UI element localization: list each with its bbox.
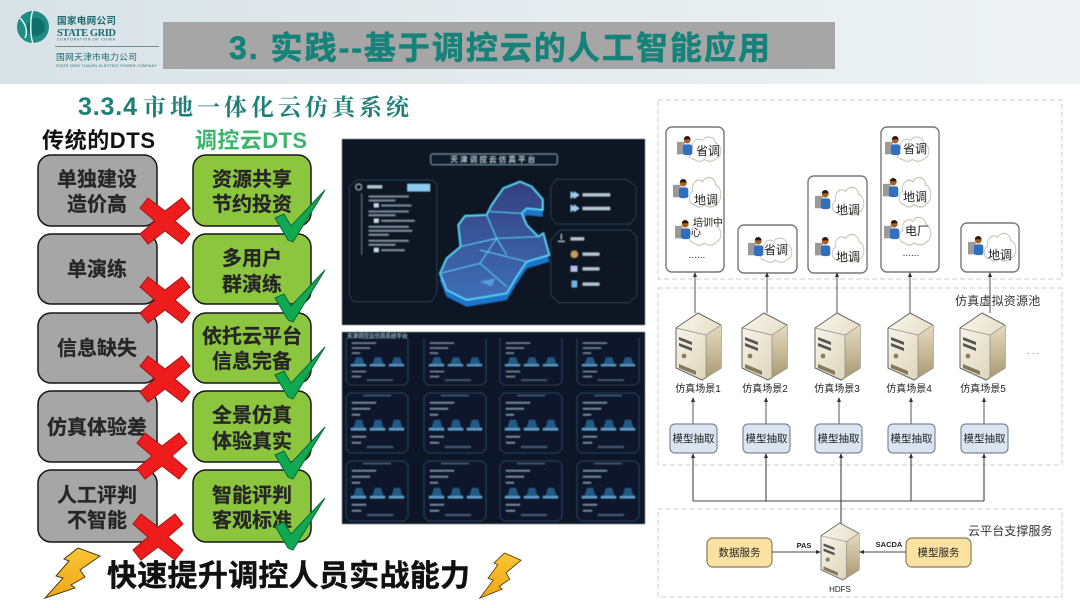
icons: red crosses	[133, 198, 190, 560]
diagram: server labels: 仿真场景2	[742, 382, 788, 395]
item: 依托云平台信息完备: 信息完备	[212, 349, 292, 373]
diagram: model extraction boxes	[670, 424, 1008, 453]
icon: left lightning bolt	[45, 548, 100, 598]
icon: right lightning bolt	[480, 553, 521, 598]
box: 数据服务: 数据服务	[718, 546, 761, 559]
item: 单演练	[38, 234, 157, 304]
arrow: PAS: PAS	[797, 541, 811, 550]
item: 人工评判不智能: 不智能	[67, 509, 127, 532]
section heading: 3.3.4	[78, 93, 137, 121]
item: 仿真体验差: 仿真体验差	[47, 415, 147, 439]
title bar	[163, 22, 835, 69]
title bar: 3. 实践--基于调控云的人工智能应用	[229, 30, 770, 66]
arrow: PAS	[772, 541, 821, 554]
diagram: simulation servers	[676, 313, 1005, 380]
diagram: zone background frames	[658, 100, 1062, 597]
diagram: top user group 1: ......	[689, 250, 705, 261]
row 3 cards	[346, 461, 639, 521]
right download panel	[551, 230, 637, 303]
label: HDFS: HDFS	[829, 585, 851, 594]
company logo: STATE GRID	[57, 28, 116, 39]
right entry panel	[551, 179, 636, 224]
diagram: top user group 4: 地调	[903, 190, 927, 204]
diagram: model extraction boxes: 模型抽取	[964, 432, 1006, 445]
diagram: top user group 1: 地调	[694, 193, 718, 207]
cloud DTS items	[193, 155, 311, 542]
left info panel	[349, 180, 437, 302]
company logo: STATE GRID TIANJIN ELECTRIC POWER COMPANY	[56, 64, 158, 68]
diagram: top user group 4	[881, 127, 939, 272]
diagram: bus from HDFS to extraction boxes	[691, 453, 986, 525]
item: 多用户群演练	[193, 234, 311, 304]
item: 单演练: 单演练	[67, 257, 127, 281]
item: 多用户群演练: 多用户	[222, 246, 282, 270]
diagram: server labels: 仿真场景1	[675, 382, 721, 395]
diagram: top user group 5: 地调	[988, 248, 1012, 262]
item: 智能评判客观标准	[193, 470, 311, 542]
diagram: model extraction boxes: 模型抽取	[818, 432, 860, 445]
company logo	[17, 11, 159, 68]
row 1 cards	[346, 335, 639, 385]
item: 单独建设造价高: 造价高	[67, 192, 127, 216]
diagram: server labels: 仿真场景3	[814, 382, 860, 395]
item: 人工评判不智能	[38, 470, 157, 542]
row 2 cards	[346, 393, 639, 453]
conclusion text: 快速提升调控人员实战能力	[107, 560, 470, 593]
item: 资源共享节约投资	[193, 155, 311, 226]
item: 多用户群演练: 群演练	[222, 272, 282, 296]
box: 模型服务	[906, 538, 971, 567]
diagram: top user group 4: 省调	[903, 142, 927, 156]
diagram: top user group 3: 地调	[836, 250, 860, 264]
screenshot: scenario card grid	[342, 332, 645, 524]
diagram: top user group 1: 省调	[696, 144, 720, 158]
header band	[0, 0, 1080, 84]
box: 模型服务: 模型服务	[918, 546, 960, 559]
item: 资源共享节约投资: 节约投资	[212, 193, 292, 216]
item: 智能评判客观标准: 智能评判	[212, 484, 292, 507]
diagram: top user group 3	[808, 176, 867, 273]
diagram: server labels: 仿真场景4	[886, 382, 932, 395]
Tianjin 3D map	[440, 182, 549, 307]
diagram: model extraction boxes: 模型抽取	[672, 432, 715, 445]
diagram: top user group 1	[666, 127, 724, 272]
item: 人工评判不智能: 人工评判	[57, 484, 137, 507]
column heading: traditional DTS: 传统的DTS	[42, 128, 155, 153]
diagram: top user group 4: 电厂	[905, 224, 929, 238]
item: 智能评判客观标准: 客观标准	[212, 508, 292, 532]
item: 单独建设造价高: 单独建设	[57, 168, 137, 191]
diagram: top user group 2	[738, 225, 797, 273]
grid title bar: 天津调控云仿真系统平台	[347, 332, 408, 340]
zone label: 云平台支撑服务: 云平台支撑服务	[968, 523, 1053, 538]
diagram: arrows from servers to user groups	[693, 272, 992, 313]
diagram: arrows from extraction boxes to servers	[691, 397, 986, 424]
item: 资源共享节约投资: 资源共享	[212, 168, 292, 191]
item: 单独建设造价高	[38, 155, 157, 226]
diagram: top user group 4: ......	[903, 248, 919, 259]
diagram: top user group 1: 心	[691, 227, 701, 239]
item: 全景仿真体验真实	[193, 391, 311, 462]
item: 全景仿真体验真实: 全景仿真	[212, 403, 292, 427]
company logo: 国网天津市电力公司	[56, 51, 137, 62]
ellipsis: more servers: ...	[1027, 346, 1041, 357]
box: 数据服务	[707, 538, 772, 567]
company logo: 国家电网公司	[57, 15, 116, 27]
grid title bar	[342, 332, 645, 340]
diagram: top user group 2: 省调	[764, 243, 788, 257]
diagram: server labels: 仿真场景5	[960, 382, 1006, 395]
diagram: top user group 1: 培训中	[693, 216, 723, 229]
screenshot: simulation platform map	[342, 139, 645, 325]
traditional DTS items	[38, 155, 157, 542]
diagram: top user group 3: 地调	[836, 203, 860, 217]
item: 全景仿真体验真实: 体验真实	[212, 429, 292, 453]
diagram: model extraction boxes: 模型抽取	[746, 432, 788, 445]
item: 信息缺失: 信息缺失	[57, 336, 137, 360]
arrow: SACDA	[859, 540, 906, 554]
diagram: model extraction boxes: 模型抽取	[890, 432, 933, 445]
zone label: 仿真虚拟资源池: 仿真虚拟资源池	[955, 294, 1040, 308]
diagram: server labels	[675, 382, 1006, 395]
diagram: top user group 5	[961, 223, 1019, 272]
section heading: 市地一体化云仿真系统	[143, 89, 413, 122]
platform header	[431, 154, 557, 165]
arrow: SACDA: SACDA	[876, 540, 903, 549]
item: 信息缺失	[38, 313, 157, 383]
column heading: cloud DTS: 调控云DTS	[195, 128, 307, 153]
icon: HDFS server	[821, 523, 859, 580]
item: 依托云平台信息完备: 依托云平台	[202, 324, 302, 348]
item: 仿真体验差	[38, 391, 157, 462]
company logo: CORPORATION OF CHINA	[57, 38, 116, 42]
icons: green checks	[275, 190, 325, 550]
platform header: 天津调控云仿真平台	[451, 155, 537, 164]
item: 依托云平台信息完备	[193, 313, 311, 383]
